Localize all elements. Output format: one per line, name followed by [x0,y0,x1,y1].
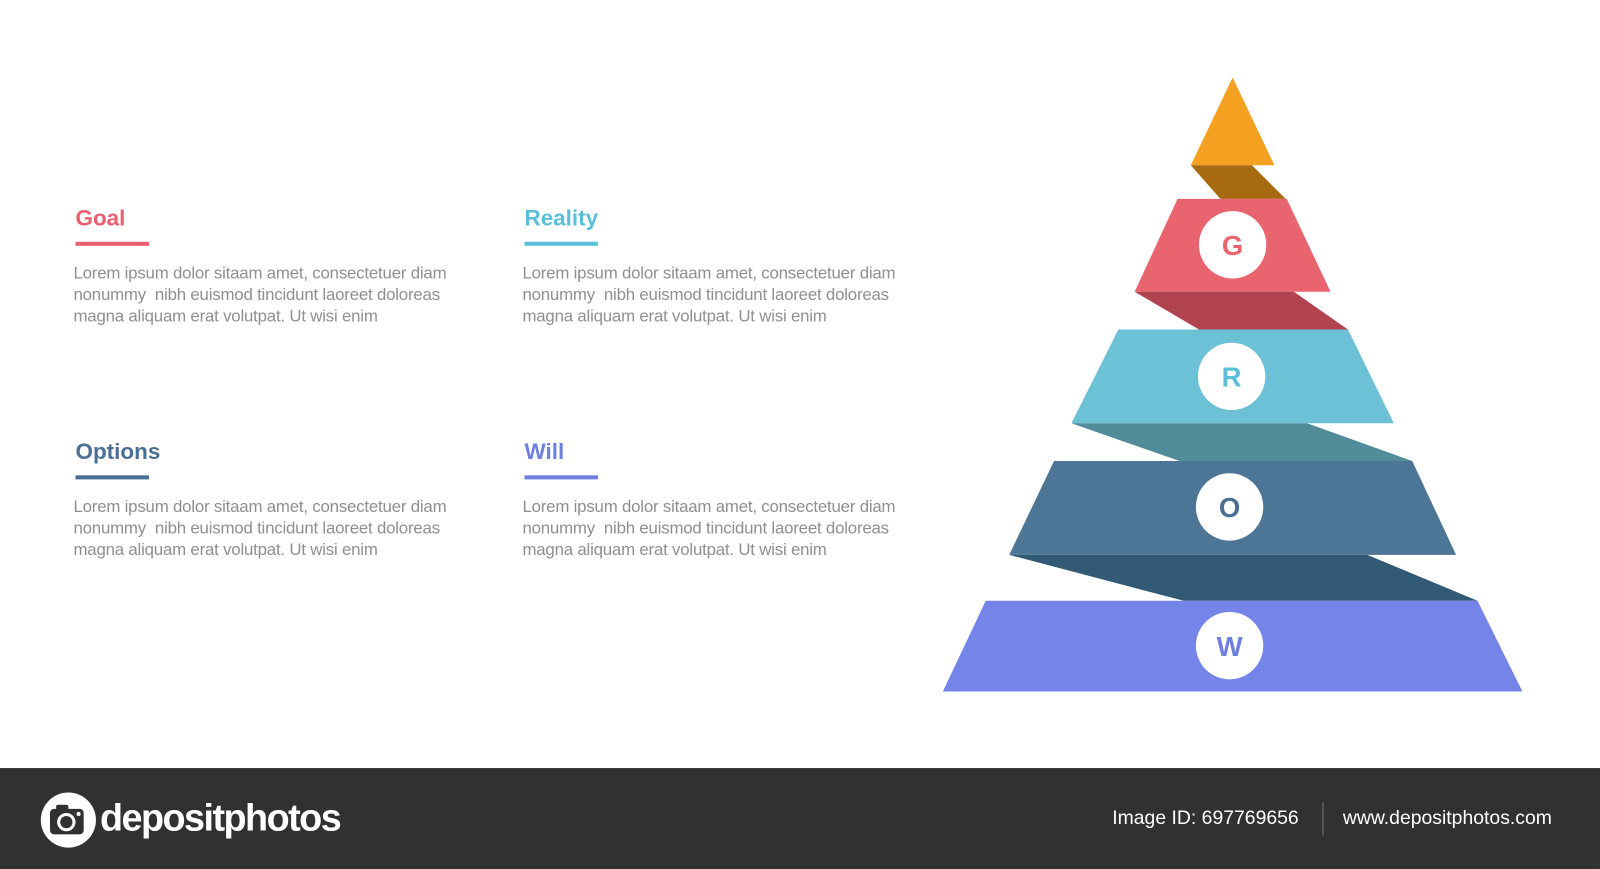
logo icon: camera [40,792,96,848]
text block: Will [522,439,895,559]
body: Reality [522,264,895,325]
tier R: R [1222,362,1242,393]
heading: Will: Will [524,439,564,464]
body: Goal [73,264,446,325]
pyramid tip [1191,78,1274,165]
body: Will: magna aliquam erat volutpat. Ut wisi enim [522,541,827,559]
text block: Goal [73,205,446,325]
body: Goal: magna aliquam erat volutpat. Ut wisi enim [73,307,378,325]
logo text: depositphotos [100,797,340,838]
body: Options: Lorem ipsum dolor sitaam amet, consectetuer diam [73,498,446,516]
tier O [1009,461,1456,555]
image id: Image ID: 697769656 [1112,808,1299,829]
body: Options: nonummy nibh euismod tincidunt laoreet doloreas [73,519,440,538]
body: Goal: nonummy nibh euismod tincidunt laoreet doloreas [73,286,440,304]
heading: Goal: Goal [76,205,125,231]
heading: Options: Options [76,439,160,464]
text block: Options [73,439,446,559]
body: Reality: Lorem ipsum dolor sitaam amet, consectetuer diam [522,264,895,283]
heading: Reality: Reality [524,205,598,231]
tier O: O [1219,492,1240,523]
tier W [943,601,1522,692]
body: Will [522,498,895,559]
tier R [1071,329,1394,423]
text block: Reality [522,205,895,325]
body: Reality: nonummy nibh euismod tincidunt laoreet doloreas [522,286,889,304]
body: Goal: Lorem ipsum dolor sitaam amet, consectetuer diam [73,264,446,283]
tier W: W [1217,631,1243,662]
footer bar [0,768,1600,869]
body: Options: magna aliquam erat volutpat. Ut wisi enim [73,541,378,559]
body: Will: Lorem ipsum dolor sitaam amet, consectetuer diam [522,498,895,516]
body: Will: nonummy nibh euismod tincidunt laoreet doloreas [522,519,889,538]
website url: www.depositphotos.com [1343,808,1552,829]
body: Options [73,498,446,559]
tier G [1135,199,1331,292]
body: Reality: magna aliquam erat volutpat. Ut wisi enim [522,307,827,325]
tier G: G [1222,230,1243,261]
